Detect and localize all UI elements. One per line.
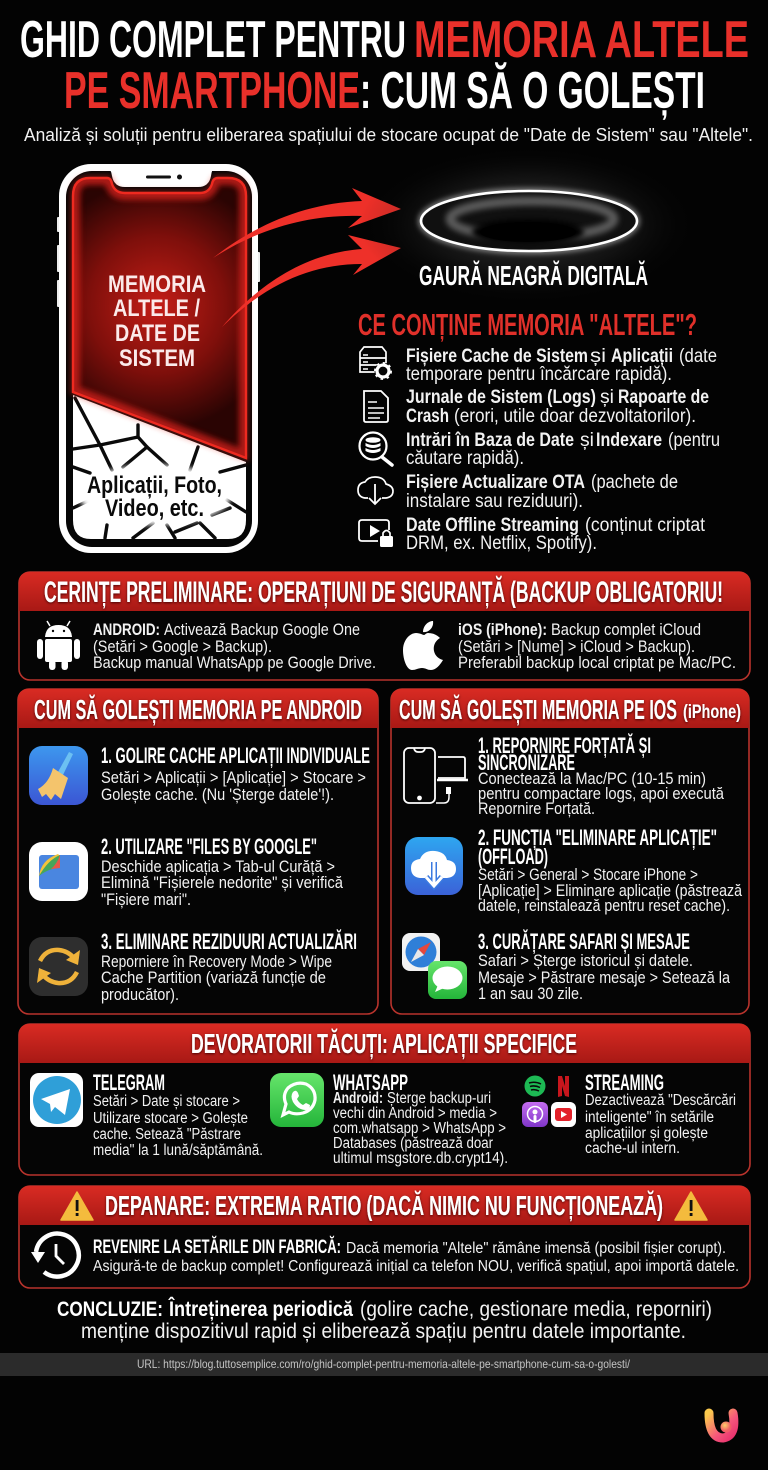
item: database index bbox=[360, 430, 720, 469]
step 3 bbox=[478, 929, 731, 1003]
item: streaming: cache-ul intern. bbox=[585, 1140, 680, 1157]
heading: ios: (iPhone) bbox=[683, 702, 741, 723]
red system data area bbox=[73, 178, 246, 458]
item: streaming bbox=[585, 1070, 736, 1157]
item: database index: și bbox=[580, 430, 594, 451]
item: cache files: Fișiere Cache de Sistem bbox=[406, 346, 588, 367]
text: android backup: (Setări > Google > Backup). bbox=[93, 638, 272, 656]
item: telegram: Utilizare stocare > Golește bbox=[93, 1110, 248, 1127]
step 2: (OFFLOAD) bbox=[478, 844, 548, 869]
step 2 bbox=[101, 834, 344, 909]
text: android backup: Activează Backup Google One bbox=[164, 621, 360, 639]
panel: silent devourers bbox=[19, 1024, 750, 1175]
url bar: URL: https://blog.tuttosemplice.com/ro/ghid-complet-pentru-memoria-altele-pe-smartphone-cum-sa-o-golesti/ bbox=[137, 1357, 631, 1371]
lower storage area with cracks bbox=[73, 395, 246, 539]
icon: update residue bbox=[29, 937, 88, 996]
step 3: Safari > Șterge istoricul și datele. bbox=[478, 952, 693, 970]
lower storage area with cracks: Video, etc. bbox=[105, 495, 204, 522]
item: system logs: și bbox=[600, 387, 614, 408]
item: streaming: STREAMING bbox=[585, 1070, 664, 1095]
step 3: 3. ELIMINARE REZIDUURI ACTUALIZĂRI bbox=[101, 929, 357, 954]
text: factory reset: Dacă memoria "Altele" rămâne imensă (posibil fișier corupt). bbox=[346, 1240, 726, 1257]
step 3: Cache Partition (variază funcție de bbox=[101, 969, 326, 987]
step 2: Deschide aplicația > Tab-ul Curăță > bbox=[101, 858, 335, 876]
icon: files by google bbox=[29, 842, 88, 901]
item: streaming: aplicațiilor și golește bbox=[585, 1125, 708, 1142]
icon: warning right bbox=[675, 1192, 707, 1220]
arrow: to black hole, upper bbox=[213, 188, 401, 258]
step 1: Conectează la Mac/PC (10-15 min) bbox=[478, 770, 706, 788]
icon: offload cloud bbox=[405, 837, 463, 895]
icon: apple bbox=[403, 621, 443, 670]
item: database index: (pentru bbox=[668, 430, 720, 451]
step 3: Reporniere în Recovery Mode > Wipe bbox=[101, 953, 332, 971]
item: system logs: Rapoarte de bbox=[618, 387, 709, 408]
red system data area: DATE DE bbox=[115, 320, 200, 347]
text: ios backup bbox=[458, 621, 736, 672]
item: cache files: temporare pentru încărcare rapidă). bbox=[406, 364, 672, 385]
step 1: Golește cache. (Nu 'Șterge datele'!). bbox=[101, 786, 334, 804]
item: whatsapp: WHATSAPP bbox=[333, 1070, 408, 1095]
panel: troubleshooting bbox=[19, 1186, 750, 1288]
icon: android bbox=[37, 621, 80, 670]
step 3 bbox=[101, 929, 357, 1004]
item: OTA updates: (pachete de bbox=[591, 472, 678, 493]
step 1: Repornire Forțată. bbox=[478, 800, 595, 818]
icon: telegram bbox=[30, 1073, 83, 1127]
item: offline streaming: (conținut criptat bbox=[585, 515, 706, 536]
item: cache files: Aplicații bbox=[611, 346, 673, 367]
title: GHID COMPLET PENTRU bbox=[20, 11, 406, 69]
red system data area: SISTEM bbox=[119, 345, 195, 372]
item: OTA updates: instalare sau reziduuri). bbox=[406, 491, 583, 512]
step 1: 1. REPORNIRE FORȚATĂ ȘI bbox=[478, 733, 651, 758]
icon: streaming apps bbox=[522, 1076, 576, 1127]
step 3: producător). bbox=[101, 986, 179, 1004]
icon: factory reset clock bbox=[31, 1234, 79, 1277]
step 1: pentru compactare logs, apoi execută bbox=[478, 785, 725, 803]
step 2: "Fișiere mari". bbox=[101, 891, 191, 909]
step 1 bbox=[101, 743, 370, 804]
step 3: 1 an sau 30 zile. bbox=[478, 985, 583, 1003]
text: ios backup: iOS (iPhone): bbox=[458, 621, 547, 639]
conclusion: CONCLUZIE: bbox=[57, 1298, 163, 1321]
step 3: Mesaje > Păstrare mesaje > Setează la bbox=[478, 969, 731, 987]
conclusion: (golire cache, gestionare media, reporniri) bbox=[360, 1298, 712, 1321]
red system data area: ALTELE / bbox=[113, 295, 200, 322]
item: database index: Indexare bbox=[596, 430, 662, 451]
item: OTA updates: Fișiere Actualizare OTA bbox=[406, 472, 585, 493]
text: factory reset: REVENIRE LA SETĂRILE DIN FABRICĂ: bbox=[93, 1236, 341, 1258]
step 1: 1. GOLIRE CACHE APLICAȚII INDIVIDUALE bbox=[101, 743, 370, 768]
icon: phone and laptop bbox=[404, 748, 468, 803]
item: OTA updates bbox=[358, 472, 678, 512]
step 2: Setări > General > Stocare iPhone > bbox=[478, 866, 698, 884]
icon: whatsapp bbox=[270, 1073, 324, 1127]
illustration: smartphone with system data bbox=[57, 164, 260, 553]
icon: broom bbox=[29, 746, 88, 805]
panel: clean memory on android bbox=[18, 689, 378, 1014]
text: ios backup: (Setări > [Nume] > iCloud > Backup). bbox=[458, 638, 695, 656]
item: whatsapp: Android: bbox=[333, 1090, 383, 1107]
step 2 bbox=[478, 825, 743, 915]
panel: prerequisites bbox=[19, 572, 750, 680]
conclusion bbox=[57, 1297, 712, 1343]
item: cache files: și bbox=[590, 346, 606, 367]
logo bbox=[709, 1413, 734, 1438]
item: cache files bbox=[360, 346, 717, 385]
title bbox=[20, 11, 749, 120]
item: telegram: Setări > Date și stocare > bbox=[93, 1093, 240, 1110]
item: database index: căutare rapidă). bbox=[406, 448, 524, 469]
item: offline streaming: DRM, ex. Netflix, Spotify). bbox=[406, 533, 597, 554]
icon: safari and messages bbox=[402, 933, 467, 999]
lower storage area with cracks: Aplicații, Foto, bbox=[87, 472, 222, 499]
item: system logs: Crash bbox=[406, 406, 449, 427]
step 1: Setări > Aplicații > [Aplicație] > Stocare > bbox=[101, 769, 366, 787]
item: whatsapp: Șterge backup-uri bbox=[387, 1090, 491, 1107]
text: android backup: Backup manual WhatsApp pe Google Drive. bbox=[93, 654, 376, 672]
item: database index: Intrări în Baza de Date bbox=[406, 430, 574, 451]
item: whatsapp: com.whatsapp > WhatsApp > bbox=[333, 1120, 506, 1137]
item: system logs bbox=[364, 387, 709, 427]
item: whatsapp: ultimul msgstore.db.crypt14). bbox=[333, 1150, 508, 1167]
illustration: digital black hole bbox=[359, 145, 699, 305]
item: telegram: media" la 1 lună/săptămână. bbox=[93, 1142, 263, 1159]
step 2: datele, reinstalează pentru reset cache). bbox=[478, 897, 730, 915]
item: cache files: (date bbox=[679, 346, 717, 367]
conclusion: Întreținerea periodică bbox=[168, 1297, 353, 1321]
item: whatsapp: vechi din Android > media > bbox=[333, 1105, 497, 1122]
list: contents of other memory bbox=[358, 346, 720, 554]
item: offline streaming: Date Offline Streaming bbox=[406, 515, 579, 536]
text: ios backup: Preferabil backup local criptat pe Mac/PC. bbox=[458, 654, 736, 672]
item: whatsapp: Databases (păstrează doar bbox=[333, 1135, 493, 1152]
item: offline streaming bbox=[359, 515, 706, 554]
item: streaming: inteligente" în setările bbox=[585, 1109, 714, 1126]
text: android backup bbox=[93, 621, 376, 672]
item: streaming: Dezactivează "Descărcări bbox=[585, 1092, 736, 1109]
red system data area: MEMORIA bbox=[108, 271, 206, 298]
item: telegram: TELEGRAM bbox=[93, 1070, 165, 1095]
conclusion: menține dispozitivul rapid și eliberează spațiu pentru datele importante. bbox=[81, 1320, 686, 1343]
text: ios backup: Backup complet iCloud bbox=[551, 621, 701, 639]
step 2: 2. UTILIZARE "FILES BY GOOGLE" bbox=[101, 834, 317, 859]
item: whatsapp bbox=[333, 1070, 508, 1167]
icon: warning left bbox=[61, 1192, 93, 1220]
panel: clean memory on ios bbox=[391, 689, 749, 1014]
heading: android: CUM SĂ GOLEȘTI MEMORIA PE ANDROID bbox=[34, 694, 362, 725]
step 1: SINCRONIZARE bbox=[478, 750, 575, 775]
title: PE SMARTPHONE bbox=[64, 62, 360, 120]
item: telegram bbox=[93, 1070, 263, 1159]
step 1 bbox=[478, 733, 725, 818]
step 2: Elimină "Fișierele nedorite" și verifică bbox=[101, 874, 344, 892]
url bar bbox=[0, 1353, 768, 1376]
item: system logs: Jurnale de Sistem (Logs) bbox=[406, 387, 596, 408]
item: telegram: cache. Setează "Păstrare bbox=[93, 1126, 241, 1143]
item: system logs: (erori, utile doar dezvoltatorilor). bbox=[454, 406, 696, 427]
arrow: to black hole, lower bbox=[222, 235, 401, 327]
text: factory reset bbox=[93, 1236, 739, 1275]
text: android backup: ANDROID: bbox=[93, 621, 160, 639]
